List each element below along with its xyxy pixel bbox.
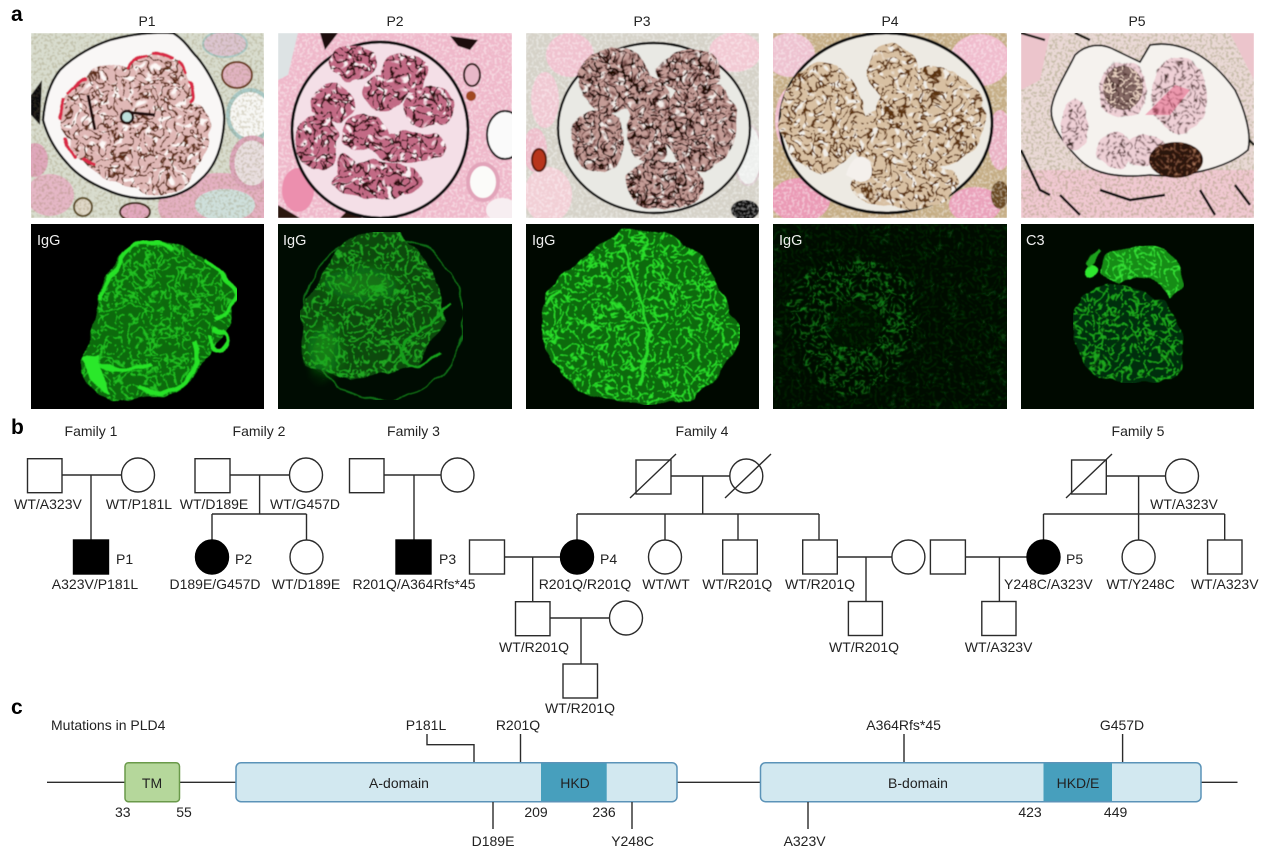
pedigree: Family 4: WT/R201Q [499, 639, 569, 655]
mutation Y248C: Y248C [611, 833, 654, 849]
immunofluorescence image P5 with C3 label [1021, 224, 1254, 409]
immunofluorescence image P4 with IgG label [773, 224, 1007, 409]
pedigree: Family 5: WT/A323V [1191, 576, 1259, 592]
mutation P181L [406, 717, 474, 762]
capsule [1051, 44, 1249, 176]
immunofluorescence image P3 with IgG label [526, 224, 759, 409]
label IgG: IgG [37, 233, 60, 249]
mutation R201Q: R201Q [496, 717, 540, 733]
pedigree: Family 1: WT/P181L [106, 496, 172, 512]
histology image P1 [31, 33, 264, 218]
capsule [780, 33, 992, 213]
pedigree: Family 3: R201Q/A364Rfs*45 [353, 576, 476, 592]
residue numbers: 33 [115, 804, 131, 820]
mutation A364Rfs*45 [866, 717, 941, 762]
column label P3: P3 [633, 13, 651, 29]
label C3: C3 [1026, 233, 1045, 249]
pedigree: Family 1 [14, 423, 172, 592]
label IgG: IgG [283, 233, 306, 249]
panel letter a: a [11, 3, 23, 26]
mutation A323V: A323V [784, 833, 826, 849]
mutation D189E: D189E [472, 833, 514, 849]
pedigree: Family 1: WT/A323V [14, 496, 82, 512]
pedigree: Family 5: P5 [1066, 551, 1083, 567]
mutation D189E [472, 802, 514, 849]
B-domain with HKD/E [760, 763, 1201, 802]
pedigree: Family 2: WT/D189E [180, 496, 248, 512]
mutation G457D: G457D [1100, 717, 1144, 733]
mutation R201Q [496, 717, 540, 762]
panel letter c: c [11, 696, 23, 719]
pedigree: Family 5: WT/A323V [1150, 496, 1218, 512]
pedigree: Family 4: R201Q/R201Q [539, 576, 631, 592]
label IgG: IgG [532, 233, 555, 249]
pedigree: Family 2: Family 2 [233, 423, 286, 439]
panel b: family pedigrees [11, 416, 1259, 716]
pedigree: Family 3: P3 [439, 551, 456, 567]
panel c: PLD4 protein domain map [11, 696, 1238, 849]
mutation Y248C [611, 802, 654, 849]
mutation A323V [784, 802, 826, 849]
capsule [558, 43, 750, 213]
pedigree: Family 5 [930, 423, 1259, 655]
heading: Mutations in PLD4: Mutations in PLD4 [51, 717, 166, 733]
residue numbers: 236 [592, 804, 616, 820]
pedigree: Family 4: WT/R201Q [785, 576, 855, 592]
pedigree: Family 4: WT/WT [642, 576, 690, 592]
A-domain with HKD: A-domain [369, 775, 429, 791]
column label P4: P4 [881, 13, 899, 29]
pedigree: Family 4 [470, 423, 925, 716]
mutation G457D [1100, 717, 1144, 762]
histology image P2 [278, 33, 512, 218]
pedigree: Family 3: Family 3 [387, 423, 440, 439]
TM domain: TM [142, 775, 162, 791]
pedigree: Family 4: P4 [600, 551, 617, 567]
B-domain with HKD/E: HKD/E [1057, 775, 1099, 791]
pedigree: Family 1: A323V/P181L [52, 576, 138, 592]
A-domain with HKD [236, 763, 677, 802]
column label P1: P1 [138, 13, 156, 29]
residue numbers: 55 [176, 804, 192, 820]
immunofluorescence image P2 with IgG label [278, 224, 512, 409]
pedigree: Family 4: WT/R201Q [829, 639, 899, 655]
histology image P4 [773, 33, 1007, 218]
pedigree: Family 1: Family 1 [65, 423, 118, 439]
pedigree: Family 2: P2 [235, 551, 252, 567]
pedigree: Family 5: Family 5 [1112, 423, 1165, 439]
histology image P3 [526, 33, 759, 218]
pedigree: Family 2: WT/G457D [270, 496, 340, 512]
label IgG: IgG [779, 233, 802, 249]
A-domain with HKD: HKD [560, 775, 590, 791]
histology image P5 [1021, 33, 1254, 218]
residue numbers: 423 [1018, 804, 1042, 820]
residue numbers: 209 [524, 804, 548, 820]
column label P5: P5 [1128, 13, 1146, 29]
panel letter b: b [11, 416, 24, 439]
capsule [43, 33, 224, 199]
column label P2: P2 [386, 13, 404, 29]
pedigree: Family 3 [350, 423, 476, 592]
mutation P181L: P181L [406, 717, 446, 733]
pedigree: Family 4: WT/R201Q [545, 700, 615, 716]
pedigree: Family 1: P1 [116, 551, 133, 567]
pedigree: Family 5: Y248C/A323V [1004, 576, 1093, 592]
pedigree: Family 2 [169, 423, 340, 592]
immunofluorescence image P1 with IgG label [31, 224, 264, 409]
pedigree: Family 2: WT/D189E [272, 576, 340, 592]
residue numbers [115, 804, 1127, 820]
pedigree: Family 4: Family 4 [676, 423, 729, 439]
B-domain with HKD/E: B-domain [888, 775, 948, 791]
mutation A364Rfs*45: A364Rfs*45 [866, 717, 941, 733]
TM domain [125, 763, 180, 802]
panel a: kidney glomeruli micrographs [11, 3, 1254, 409]
pedigree: Family 5: WT/A323V [965, 639, 1033, 655]
pedigree: Family 4: WT/R201Q [702, 576, 772, 592]
capsule [292, 42, 468, 218]
pedigree: Family 5: WT/Y248C [1106, 576, 1175, 592]
residue numbers: 449 [1104, 804, 1127, 820]
backbone line [47, 781, 1238, 783]
pedigree: Family 2: D189E/G457D [169, 576, 261, 592]
